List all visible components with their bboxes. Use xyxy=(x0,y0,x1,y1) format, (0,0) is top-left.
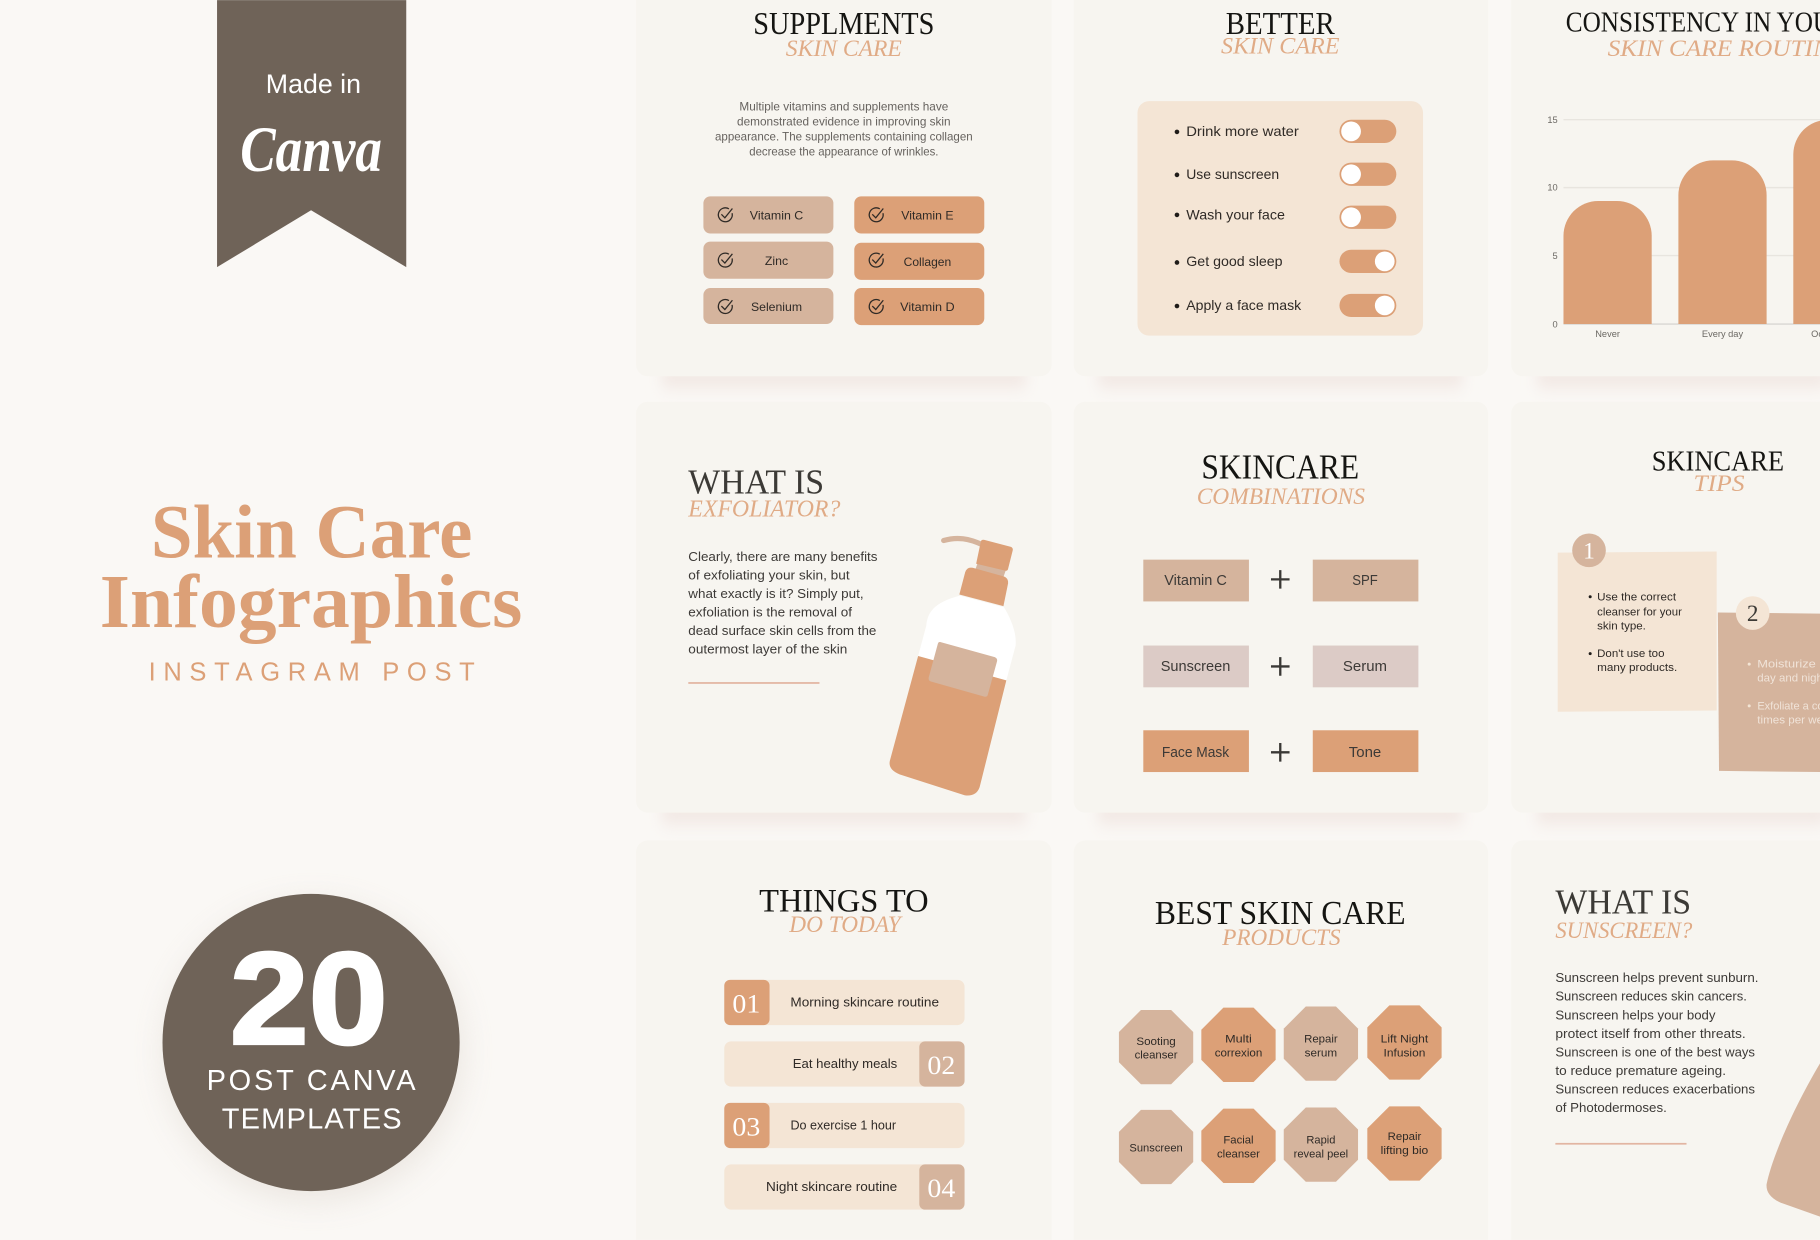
body text: of Photodermoses. xyxy=(1555,1100,1667,1115)
combination: sunscreen + serum: Serum xyxy=(1343,659,1387,675)
body text: Sunscreen is one of the best ways xyxy=(1555,1044,1755,1059)
combination: sunscreen + serum xyxy=(1143,646,1418,687)
checklist: left column: Vitamin C xyxy=(750,209,803,223)
item 04: 04 xyxy=(927,1173,955,1203)
heading: supplments: SUPPLMENTS xyxy=(753,6,934,41)
badge: 20 post canva templates: TEMPLATES xyxy=(222,1103,402,1135)
bar chart: Every day xyxy=(1702,329,1743,339)
body text: what exactly is it? Simply put, xyxy=(687,586,864,601)
description text: appearance. The supplements containing collagen xyxy=(715,131,973,144)
description text xyxy=(715,100,973,159)
subheading: exfoliator: EXFOLIATOR? xyxy=(687,496,840,523)
heading: skincare: SKINCARE xyxy=(1652,445,1784,477)
checklist: left column: Zinc xyxy=(765,254,788,268)
ribbon: made in canva: Canva xyxy=(240,114,382,186)
combination: face mask + tone xyxy=(1143,730,1418,772)
panel: better skin care xyxy=(1074,0,1488,376)
product octagons: top row: Sooting xyxy=(1136,1036,1176,1048)
tip card 1 xyxy=(1558,534,1717,712)
panel: consistency chart xyxy=(1511,0,1820,376)
product octagons: top row: Infusion xyxy=(1384,1047,1425,1059)
heading: what is: WHAT IS xyxy=(1555,883,1691,922)
tip card 2 xyxy=(1718,596,1820,772)
badge: 20 post canva templates: 20 xyxy=(230,925,388,1072)
tip card 1: cleanser for your xyxy=(1597,606,1682,618)
panel: what is exfoliator xyxy=(636,402,1052,813)
product octagons: top row: Multi xyxy=(1225,1034,1252,1046)
description text: Multiple vitamins and supplements have xyxy=(739,100,948,113)
product octagons: top row: Repair xyxy=(1304,1034,1338,1046)
badge: 20 post canva templates: POST CANVA xyxy=(207,1065,416,1097)
tip card 1: Don't use too xyxy=(1597,648,1664,660)
product octagons: top row: correxion xyxy=(1215,1047,1262,1059)
heading: best skin care: BEST SKIN CARE xyxy=(1155,895,1406,932)
body text xyxy=(687,549,878,657)
panel: best skin care products xyxy=(1074,841,1488,1240)
checklist: right column: Vitamin D xyxy=(900,300,955,314)
heading: skincare: SKINCARE xyxy=(1201,447,1359,486)
item 03 xyxy=(724,1103,965,1148)
subtitle: instagram post: INSTAGRAM POST xyxy=(149,658,475,686)
panel: things to do today xyxy=(636,841,1052,1240)
item 02: Eat healthy meals xyxy=(793,1056,898,1071)
product octagons: bottom row: cleanser xyxy=(1217,1148,1260,1160)
bar chart xyxy=(1547,115,1820,339)
subheading: sunscreen: SUNSCREEN? xyxy=(1555,918,1693,944)
habit card with toggles: Drink more water xyxy=(1186,123,1299,139)
item 01: Morning skincare routine xyxy=(790,995,939,1010)
body text: Sunscreen helps prevent sunburn. xyxy=(1555,970,1758,985)
panel: skincare combinations xyxy=(1074,402,1488,813)
bar chart: 10 xyxy=(1547,183,1558,193)
tip card 1: skin type. xyxy=(1597,620,1646,632)
item 02 xyxy=(724,1041,965,1087)
product octagons: bottom row xyxy=(1119,1106,1442,1184)
body text xyxy=(1555,970,1758,1115)
product octagons: top row: cleanser xyxy=(1135,1050,1178,1062)
item 03: 03 xyxy=(732,1111,760,1141)
checklist: left column xyxy=(703,196,833,324)
item 02: 02 xyxy=(927,1050,955,1080)
combination: vitamin c + spf xyxy=(1143,560,1418,601)
item 04 xyxy=(724,1164,965,1210)
tip card 1: 1 xyxy=(1583,538,1595,564)
body text: to reduce premature ageing. xyxy=(1555,1063,1726,1078)
tip card 2: 2 xyxy=(1747,601,1758,627)
item 01 xyxy=(724,980,965,1025)
product octagons: bottom row: Rapid xyxy=(1306,1134,1335,1146)
subheading: combinations: COMBINATIONS xyxy=(1197,484,1365,510)
combination: vitamin c + spf: SPF xyxy=(1352,573,1378,589)
combination: vitamin c + spf: Vitamin C xyxy=(1164,573,1227,589)
product octagons: bottom row: reveal peel xyxy=(1294,1148,1348,1160)
heading: better: BETTER xyxy=(1226,6,1335,41)
tip card 1: many products. xyxy=(1597,662,1677,674)
habit card with toggles: Apply a face mask xyxy=(1186,297,1301,313)
product octagons: top row xyxy=(1119,1005,1442,1084)
product octagons: bottom row: lifting bio xyxy=(1381,1145,1428,1157)
main title: Infographics xyxy=(100,559,522,644)
panel shadows xyxy=(662,369,1820,838)
ribbon: made in canva: Made in xyxy=(266,69,361,99)
combination: face mask + tone: Face Mask xyxy=(1162,745,1230,761)
habit card with toggles: Get good sleep xyxy=(1186,253,1283,269)
panel: supplements xyxy=(636,0,1052,376)
checklist: right column xyxy=(854,196,984,325)
panel: skincare tips xyxy=(1511,402,1820,813)
body text: Sunscreen reduces skin cancers. xyxy=(1555,989,1747,1004)
product octagons: bottom row: Sunscreen xyxy=(1129,1143,1183,1155)
checklist: left column: Selenium xyxy=(751,300,802,314)
habit card with toggles xyxy=(1138,101,1423,336)
item 03: Do exercise 1 hour xyxy=(790,1118,897,1133)
body text: Clearly, there are many benefits xyxy=(688,549,878,564)
body text: outermost layer of the skin xyxy=(688,642,847,657)
badge: 20 post canva templates xyxy=(162,894,462,1200)
subheading: do today: DO TODAY xyxy=(788,912,903,938)
item 04: Night skincare routine xyxy=(766,1179,897,1194)
subheading: tips: TIPS xyxy=(1693,471,1745,497)
product octagons: bottom row: Repair xyxy=(1388,1131,1422,1143)
product octagons: top row: serum xyxy=(1305,1047,1337,1059)
habit card with toggles: Use sunscreen xyxy=(1186,166,1279,182)
bar chart: 15 xyxy=(1547,115,1558,125)
subheading: skin care: SKIN CARE xyxy=(1221,34,1339,60)
body text: dead surface skin cells from the xyxy=(688,623,876,638)
description text: decrease the appearance of wrinkles. xyxy=(749,146,938,159)
checklist: right column: Vitamin E xyxy=(901,209,954,223)
subheading: skin care routine: SKIN CARE ROUTINE xyxy=(1608,36,1820,62)
main title xyxy=(100,489,522,644)
product octagons: top row: Lift Night xyxy=(1381,1034,1428,1046)
bar chart: 5 xyxy=(1553,251,1558,261)
bar chart: Never xyxy=(1595,329,1620,339)
panel: what is sunscreen xyxy=(1511,841,1820,1240)
body text: Sunscreen helps your body xyxy=(1555,1007,1716,1022)
description text: demonstrated evidence in improving skin xyxy=(737,116,951,129)
checklist: right column: Collagen xyxy=(904,255,951,269)
main title: Skin Care xyxy=(151,489,472,574)
body text: of exfoliating your skin, but xyxy=(688,567,850,582)
ribbon: made in canva xyxy=(217,0,406,267)
icon: pump bottle xyxy=(890,538,1016,796)
tip card 1: Use the correct xyxy=(1597,591,1676,603)
heading: what is: WHAT IS xyxy=(688,462,824,501)
body text: exfoliation is the removal of xyxy=(688,605,852,620)
body text: Sunscreen reduces exacerbations xyxy=(1555,1082,1755,1097)
subheading: products: PRODUCTS xyxy=(1221,925,1341,951)
habit card with toggles: Wash your face xyxy=(1186,207,1285,223)
combination: sunscreen + serum: Sunscreen xyxy=(1161,659,1230,675)
icon: bottle edge xyxy=(1767,1063,1820,1217)
item 01: 01 xyxy=(732,988,760,1018)
combination: face mask + tone: Tone xyxy=(1349,745,1381,761)
body text: protect itself from other threats. xyxy=(1555,1026,1746,1041)
product octagons: bottom row: Facial xyxy=(1223,1134,1254,1146)
heading: things to: THINGS TO xyxy=(759,883,929,919)
subheading: skin care: SKIN CARE xyxy=(786,36,902,62)
bar chart: 0 xyxy=(1553,319,1558,329)
